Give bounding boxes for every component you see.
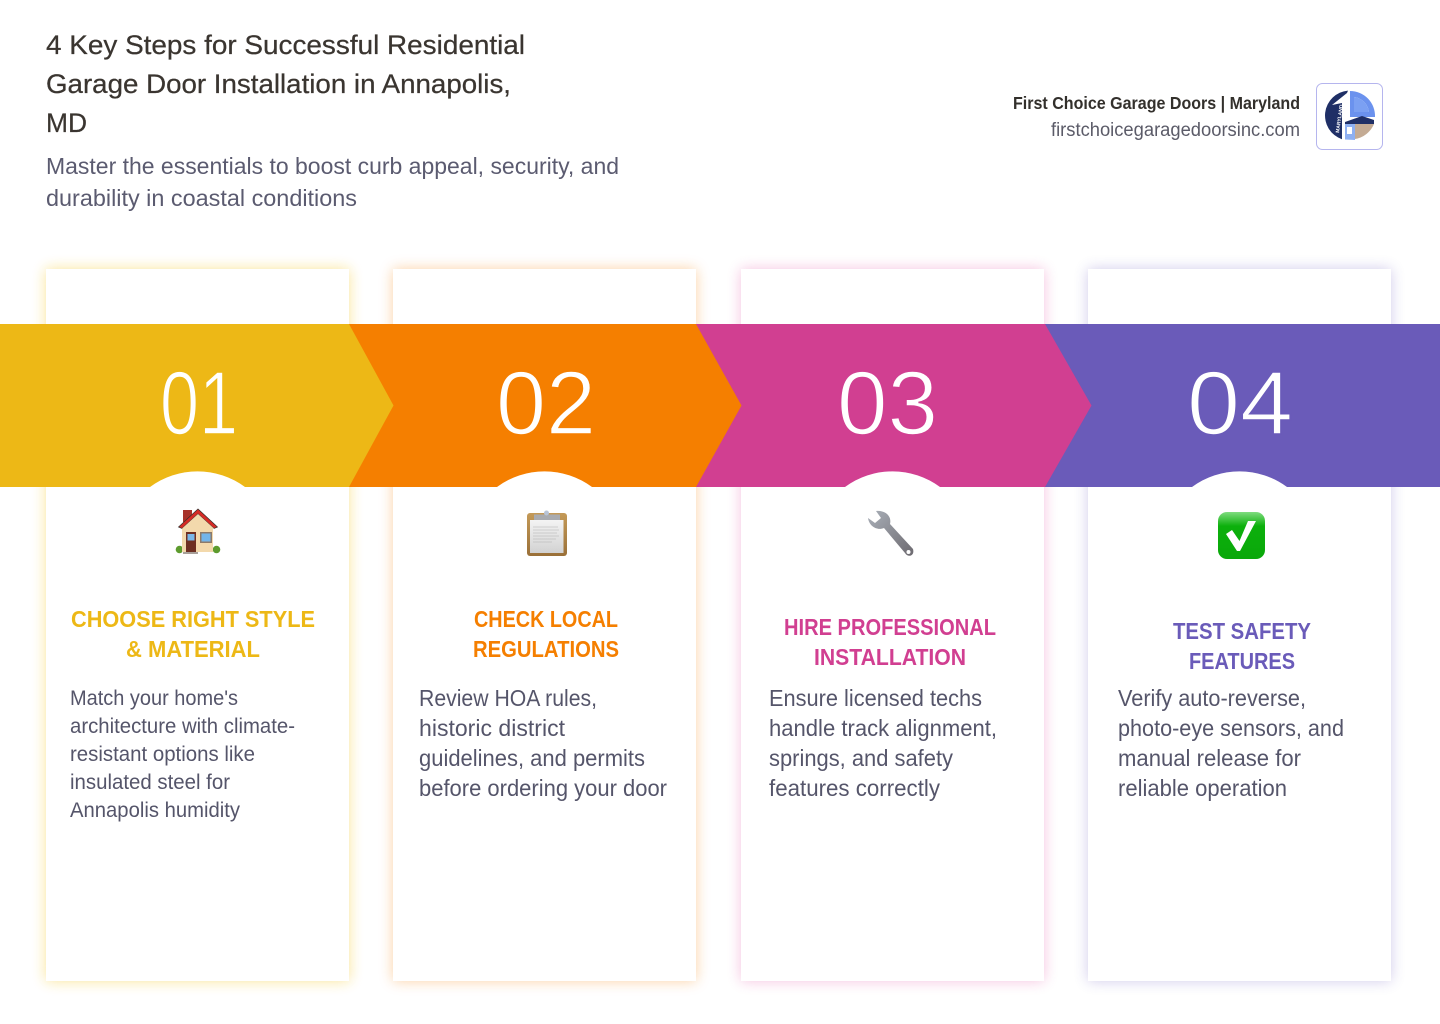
icon: company logo: [1316, 84, 1382, 150]
body text: photo-eye sensors, and: [1118, 715, 1344, 741]
subtitle: Master the essentials to boost curb appeal, security, and: [46, 153, 619, 179]
body text: Match your home's: [70, 687, 238, 710]
brand name and website: firstchoicegaragedoorsinc.com: [1051, 120, 1300, 141]
step 2: [419, 354, 667, 801]
body text: [769, 685, 997, 801]
heading: INSTALLATION: [814, 644, 966, 670]
panel: card 1 background: [46, 269, 349, 981]
brand name and website: [1013, 93, 1300, 141]
heading: & MATERIAL: [126, 636, 260, 662]
body text: springs, and safety: [769, 745, 953, 771]
icon: clipboard: [527, 510, 567, 556]
notch: white arc: [150, 471, 245, 487]
title: MD: [46, 108, 87, 138]
step number 01: 01: [160, 354, 238, 454]
body text: Verify auto-reverse,: [1118, 685, 1306, 711]
heading: CHECK LOCAL: [474, 606, 618, 632]
icon: company logo: MARYLAND: [1335, 104, 1345, 133]
panel: card 4 background: [1088, 269, 1391, 981]
brand name and website: First Choice Garage Doors | Maryland: [1013, 93, 1300, 113]
step 3: [769, 354, 997, 801]
body text: before ordering your door: [419, 775, 667, 801]
body text: architecture with climate-: [70, 715, 295, 738]
body text: handle track alignment,: [769, 715, 997, 741]
icon: green check box: [1218, 512, 1265, 559]
body text: historic district: [419, 715, 566, 741]
heading: REGULATIONS: [473, 636, 619, 662]
panel: card 3 background: [741, 269, 1044, 981]
notch: white arc: [845, 471, 940, 487]
arrow band: four chevrons: [0, 324, 1440, 487]
body text: manual release for: [1118, 745, 1301, 771]
step 1: [70, 354, 315, 822]
step 4: [1118, 354, 1344, 801]
body text: insulated steel for: [70, 771, 230, 794]
subtitle: [46, 153, 619, 211]
title: Garage Door Installation in Annapolis,: [46, 69, 511, 99]
icon: wrench: [868, 511, 913, 556]
title: [46, 30, 525, 138]
notch: white arc: [1192, 471, 1287, 487]
title: 4 Key Steps for Successful Residential: [46, 30, 525, 60]
body text: Ensure licensed techs: [769, 685, 982, 711]
step number 03: 03: [837, 354, 938, 454]
body text: resistant options like: [70, 743, 255, 766]
panel: card 2 background: [393, 269, 696, 981]
heading: [71, 606, 315, 662]
step number 02: 02: [496, 354, 596, 454]
body text: reliable operation: [1118, 775, 1287, 801]
heading: TEST SAFETY: [1173, 618, 1311, 644]
notch: white arc: [497, 471, 592, 487]
step number 04: 04: [1187, 354, 1293, 454]
body text: [1118, 685, 1344, 801]
body text: [419, 685, 667, 801]
heading: CHOOSE RIGHT STYLE: [71, 606, 315, 632]
heading: HIRE PROFESSIONAL: [784, 614, 996, 640]
body text: Annapolis humidity: [70, 799, 240, 822]
heading: [784, 614, 996, 670]
heading: [1173, 618, 1311, 674]
heading: [473, 606, 619, 662]
icon: house: [176, 509, 220, 554]
body text: Review HOA rules,: [419, 685, 597, 711]
heading: FEATURES: [1189, 648, 1295, 674]
body text: features correctly: [769, 775, 940, 801]
body text: [70, 687, 295, 822]
body text: guidelines, and permits: [419, 745, 645, 771]
subtitle: durability in coastal conditions: [46, 185, 357, 211]
